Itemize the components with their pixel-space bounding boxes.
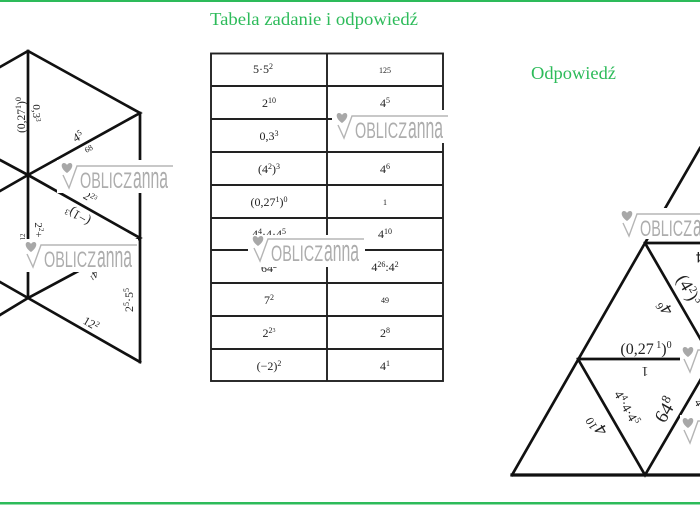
left puzzle labels: 5 bbox=[122, 302, 131, 306]
watermark 5 bbox=[617, 208, 700, 243]
right answer labels: (4 bbox=[673, 271, 697, 294]
table left column: 2 bbox=[273, 261, 277, 270]
table left column: 4 bbox=[258, 227, 262, 236]
table left column: 2 bbox=[262, 326, 268, 340]
table right column: 49 bbox=[381, 296, 389, 305]
left puzzle labels: 0,3 bbox=[30, 104, 42, 118]
title: table: Tabela zadanie i odpowiedź bbox=[210, 9, 418, 29]
table left column: 0,3 bbox=[260, 129, 274, 143]
table right column: 4 bbox=[380, 162, 386, 176]
right answer labels: 4 bbox=[611, 388, 627, 401]
table right column: 1 bbox=[383, 198, 387, 207]
left puzzle labels: + bbox=[32, 231, 44, 238]
table left column: 2 bbox=[268, 162, 272, 171]
table left column: 3 bbox=[276, 162, 280, 171]
right answer labels: 64 bbox=[651, 400, 678, 427]
table right column: :4 bbox=[385, 260, 395, 274]
table left column: 10 bbox=[268, 96, 276, 105]
table grid bbox=[211, 53, 443, 381]
left puzzle labels: 2 bbox=[89, 191, 97, 201]
left puzzle labels: 2 bbox=[122, 306, 136, 312]
right answer labels: 10 bbox=[582, 415, 600, 432]
watermark 4: anna bbox=[324, 233, 359, 268]
right answer labels: 8 bbox=[658, 392, 674, 406]
table left column: ) bbox=[280, 195, 284, 209]
watermark 4 bbox=[248, 233, 365, 268]
table left column: 4 bbox=[252, 227, 258, 241]
table right column: 26 bbox=[377, 260, 385, 269]
table left column bbox=[250, 62, 288, 373]
table right column: 1 bbox=[386, 359, 390, 368]
left puzzle labels: 3 bbox=[63, 207, 71, 217]
table left column: 0 bbox=[284, 195, 288, 204]
top border line bbox=[0, 0, 700, 2]
left puzzle triangles bbox=[0, 51, 140, 362]
left puzzle labels: 4 bbox=[70, 130, 82, 145]
table left column: 3 bbox=[272, 328, 276, 334]
left puzzle labels: 2 bbox=[93, 319, 101, 329]
table right column: 4 bbox=[378, 227, 384, 241]
table left column: 3 bbox=[274, 129, 278, 138]
watermark 7 bbox=[680, 415, 700, 448]
right answer labels: 4 bbox=[620, 393, 631, 402]
table left column: 7 bbox=[264, 293, 270, 307]
table right column: 4 bbox=[371, 260, 377, 274]
table left column: (0,27 bbox=[250, 195, 276, 209]
watermark 1: OBLICZ bbox=[80, 168, 132, 193]
right answer labels: (0,27 bbox=[620, 341, 654, 358]
table right column: 8 bbox=[386, 326, 390, 335]
table left column: ·4·4 bbox=[262, 227, 282, 241]
left puzzle labels: 68 bbox=[83, 143, 94, 155]
table right column: 4 bbox=[380, 359, 386, 373]
table left column: 64 bbox=[261, 261, 273, 275]
table left column: 2 bbox=[268, 326, 272, 335]
left puzzle labels: 0 bbox=[14, 97, 23, 101]
table left column: (−2) bbox=[257, 359, 277, 373]
watermark 3 bbox=[332, 110, 449, 145]
watermark 2: anna bbox=[97, 239, 132, 274]
table right column: 125 bbox=[379, 66, 391, 75]
left puzzle labels: ) bbox=[16, 101, 28, 105]
left puzzle labels bbox=[14, 97, 136, 334]
table left column: 2 bbox=[269, 62, 273, 71]
left puzzle labels: 4 bbox=[90, 267, 100, 280]
watermark 3: OBLICZ bbox=[355, 118, 407, 143]
table right column: 2 bbox=[395, 260, 399, 269]
left puzzle labels: 12 bbox=[81, 313, 98, 332]
left puzzle labels: 5 bbox=[122, 288, 131, 292]
right answer labels: 4 bbox=[590, 421, 612, 439]
right answer triangles bbox=[512, 148, 700, 475]
table right column: 2 bbox=[380, 326, 386, 340]
watermark 3: anna bbox=[408, 110, 443, 145]
left puzzle labels: 5 bbox=[75, 128, 83, 138]
left puzzle labels: 3 bbox=[34, 118, 42, 122]
left puzzle labels: 2 bbox=[81, 188, 93, 203]
table left column: 2 bbox=[270, 293, 274, 302]
right answer labels: 4 bbox=[656, 302, 677, 319]
left puzzle labels: (0,27 bbox=[16, 109, 28, 133]
left puzzle labels: 12 bbox=[19, 233, 27, 240]
right answer labels: 5 bbox=[633, 416, 644, 425]
table left column: 1 bbox=[276, 195, 280, 204]
table left column: 5·5 bbox=[253, 62, 269, 76]
right answer labels: ) bbox=[661, 341, 667, 358]
bottom border line bbox=[0, 502, 700, 504]
watermark 1 bbox=[57, 160, 174, 195]
watermark 1: anna bbox=[133, 160, 168, 195]
left puzzle labels: (−1) bbox=[66, 205, 93, 229]
table right column: 6 bbox=[386, 162, 390, 171]
left puzzle labels: 1 bbox=[88, 273, 96, 282]
right answer labels: 1 bbox=[654, 340, 661, 351]
right answer labels: 6 bbox=[653, 300, 667, 311]
table left column: 2 bbox=[262, 96, 268, 110]
right answer labels: ·4·4 bbox=[617, 397, 641, 424]
table left column: 2 bbox=[277, 359, 281, 368]
left puzzle labels: 2 bbox=[37, 228, 45, 232]
table right column: 10 bbox=[384, 227, 392, 236]
left puzzle labels: 3 bbox=[93, 195, 98, 202]
table right column bbox=[371, 66, 399, 373]
left puzzle labels: 2 bbox=[32, 222, 44, 228]
table left column: (4 bbox=[258, 162, 268, 176]
right answer labels bbox=[582, 248, 700, 440]
table left column: 5 bbox=[282, 227, 286, 236]
watermark 2 bbox=[21, 239, 138, 274]
left puzzle labels: ·5 bbox=[122, 292, 136, 302]
left puzzle labels: 1 bbox=[14, 105, 23, 109]
right answer labels: 0 bbox=[667, 340, 672, 351]
watermark 2: OBLICZ bbox=[44, 247, 96, 272]
watermark 4: OBLICZ bbox=[271, 241, 323, 266]
table right column: 5 bbox=[386, 96, 390, 105]
title: answer: Odpowiedź bbox=[531, 63, 616, 83]
table left column: ) bbox=[272, 162, 276, 176]
table right column: 4 bbox=[380, 96, 386, 110]
right answer labels: 2 bbox=[686, 284, 699, 295]
watermark 6 bbox=[680, 344, 700, 377]
right answer labels: 1 bbox=[642, 363, 648, 378]
